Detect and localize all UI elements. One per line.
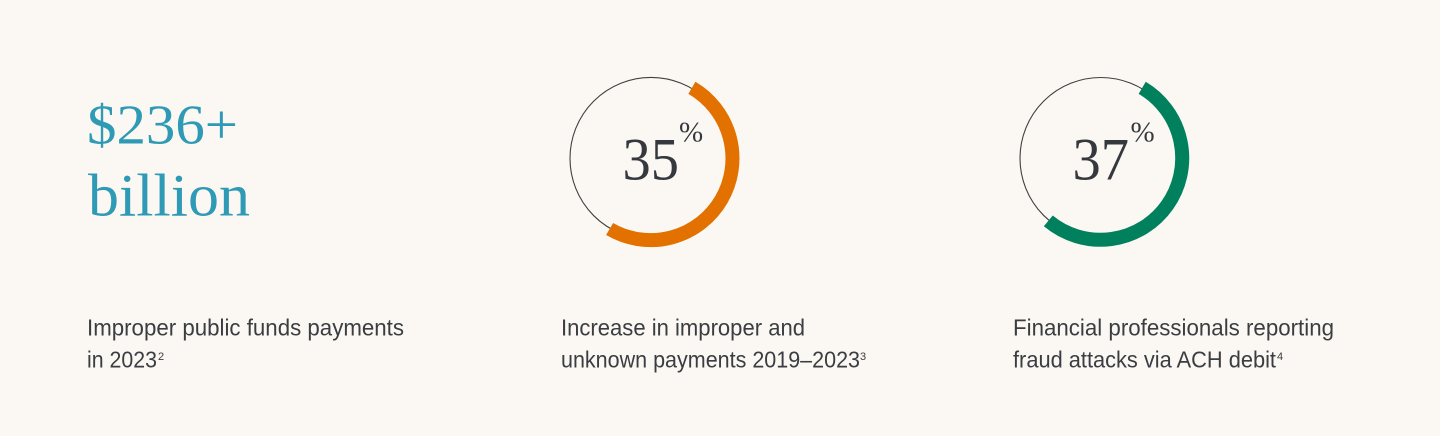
panel: financial professionals reporting fraud bbox=[1013, 78, 1334, 372]
caption: improper public funds payments: Improper public funds payments bbox=[87, 314, 404, 340]
caption: increase in improper and unknown payments: 3 bbox=[860, 351, 866, 363]
value: 35%: 35 bbox=[622, 126, 679, 192]
heading: $236+ billion: billion bbox=[88, 162, 250, 228]
value: 37%: 37 bbox=[1072, 126, 1129, 192]
panel: improper public funds bbox=[87, 94, 404, 372]
caption: financial professionals reporting fraud attacks: fraud attacks via ACH debit bbox=[1013, 346, 1277, 372]
caption: improper public funds payments: 2 bbox=[158, 351, 164, 363]
donut chart: 37 percent bbox=[1020, 78, 1182, 240]
value: 37%: % bbox=[1130, 116, 1155, 148]
panel: increase in improper payments bbox=[561, 77, 866, 372]
heading: $236+ billion: $236+ bbox=[87, 94, 238, 156]
caption: financial professionals reporting fraud attacks: 4 bbox=[1277, 351, 1283, 363]
caption: improper public funds payments bbox=[87, 314, 404, 372]
caption: financial professionals reporting fraud attacks: Financial professionals reporting bbox=[1013, 314, 1334, 340]
heading: $236+ billion bbox=[87, 94, 250, 228]
donut chart: 35 percent bbox=[570, 77, 732, 240]
caption: financial professionals reporting fraud attacks bbox=[1013, 314, 1334, 372]
caption: increase in improper and unknown payments: Increase in improper and bbox=[561, 314, 805, 340]
value: 35% bbox=[622, 116, 703, 192]
caption: increase in improper and unknown payments bbox=[561, 314, 866, 372]
value: 35%: % bbox=[679, 116, 703, 148]
caption: improper public funds payments: in 2023 bbox=[87, 346, 157, 372]
value: 37% bbox=[1072, 116, 1155, 192]
caption: increase in improper and unknown payments: unknown payments 2019–2023 bbox=[561, 346, 860, 372]
